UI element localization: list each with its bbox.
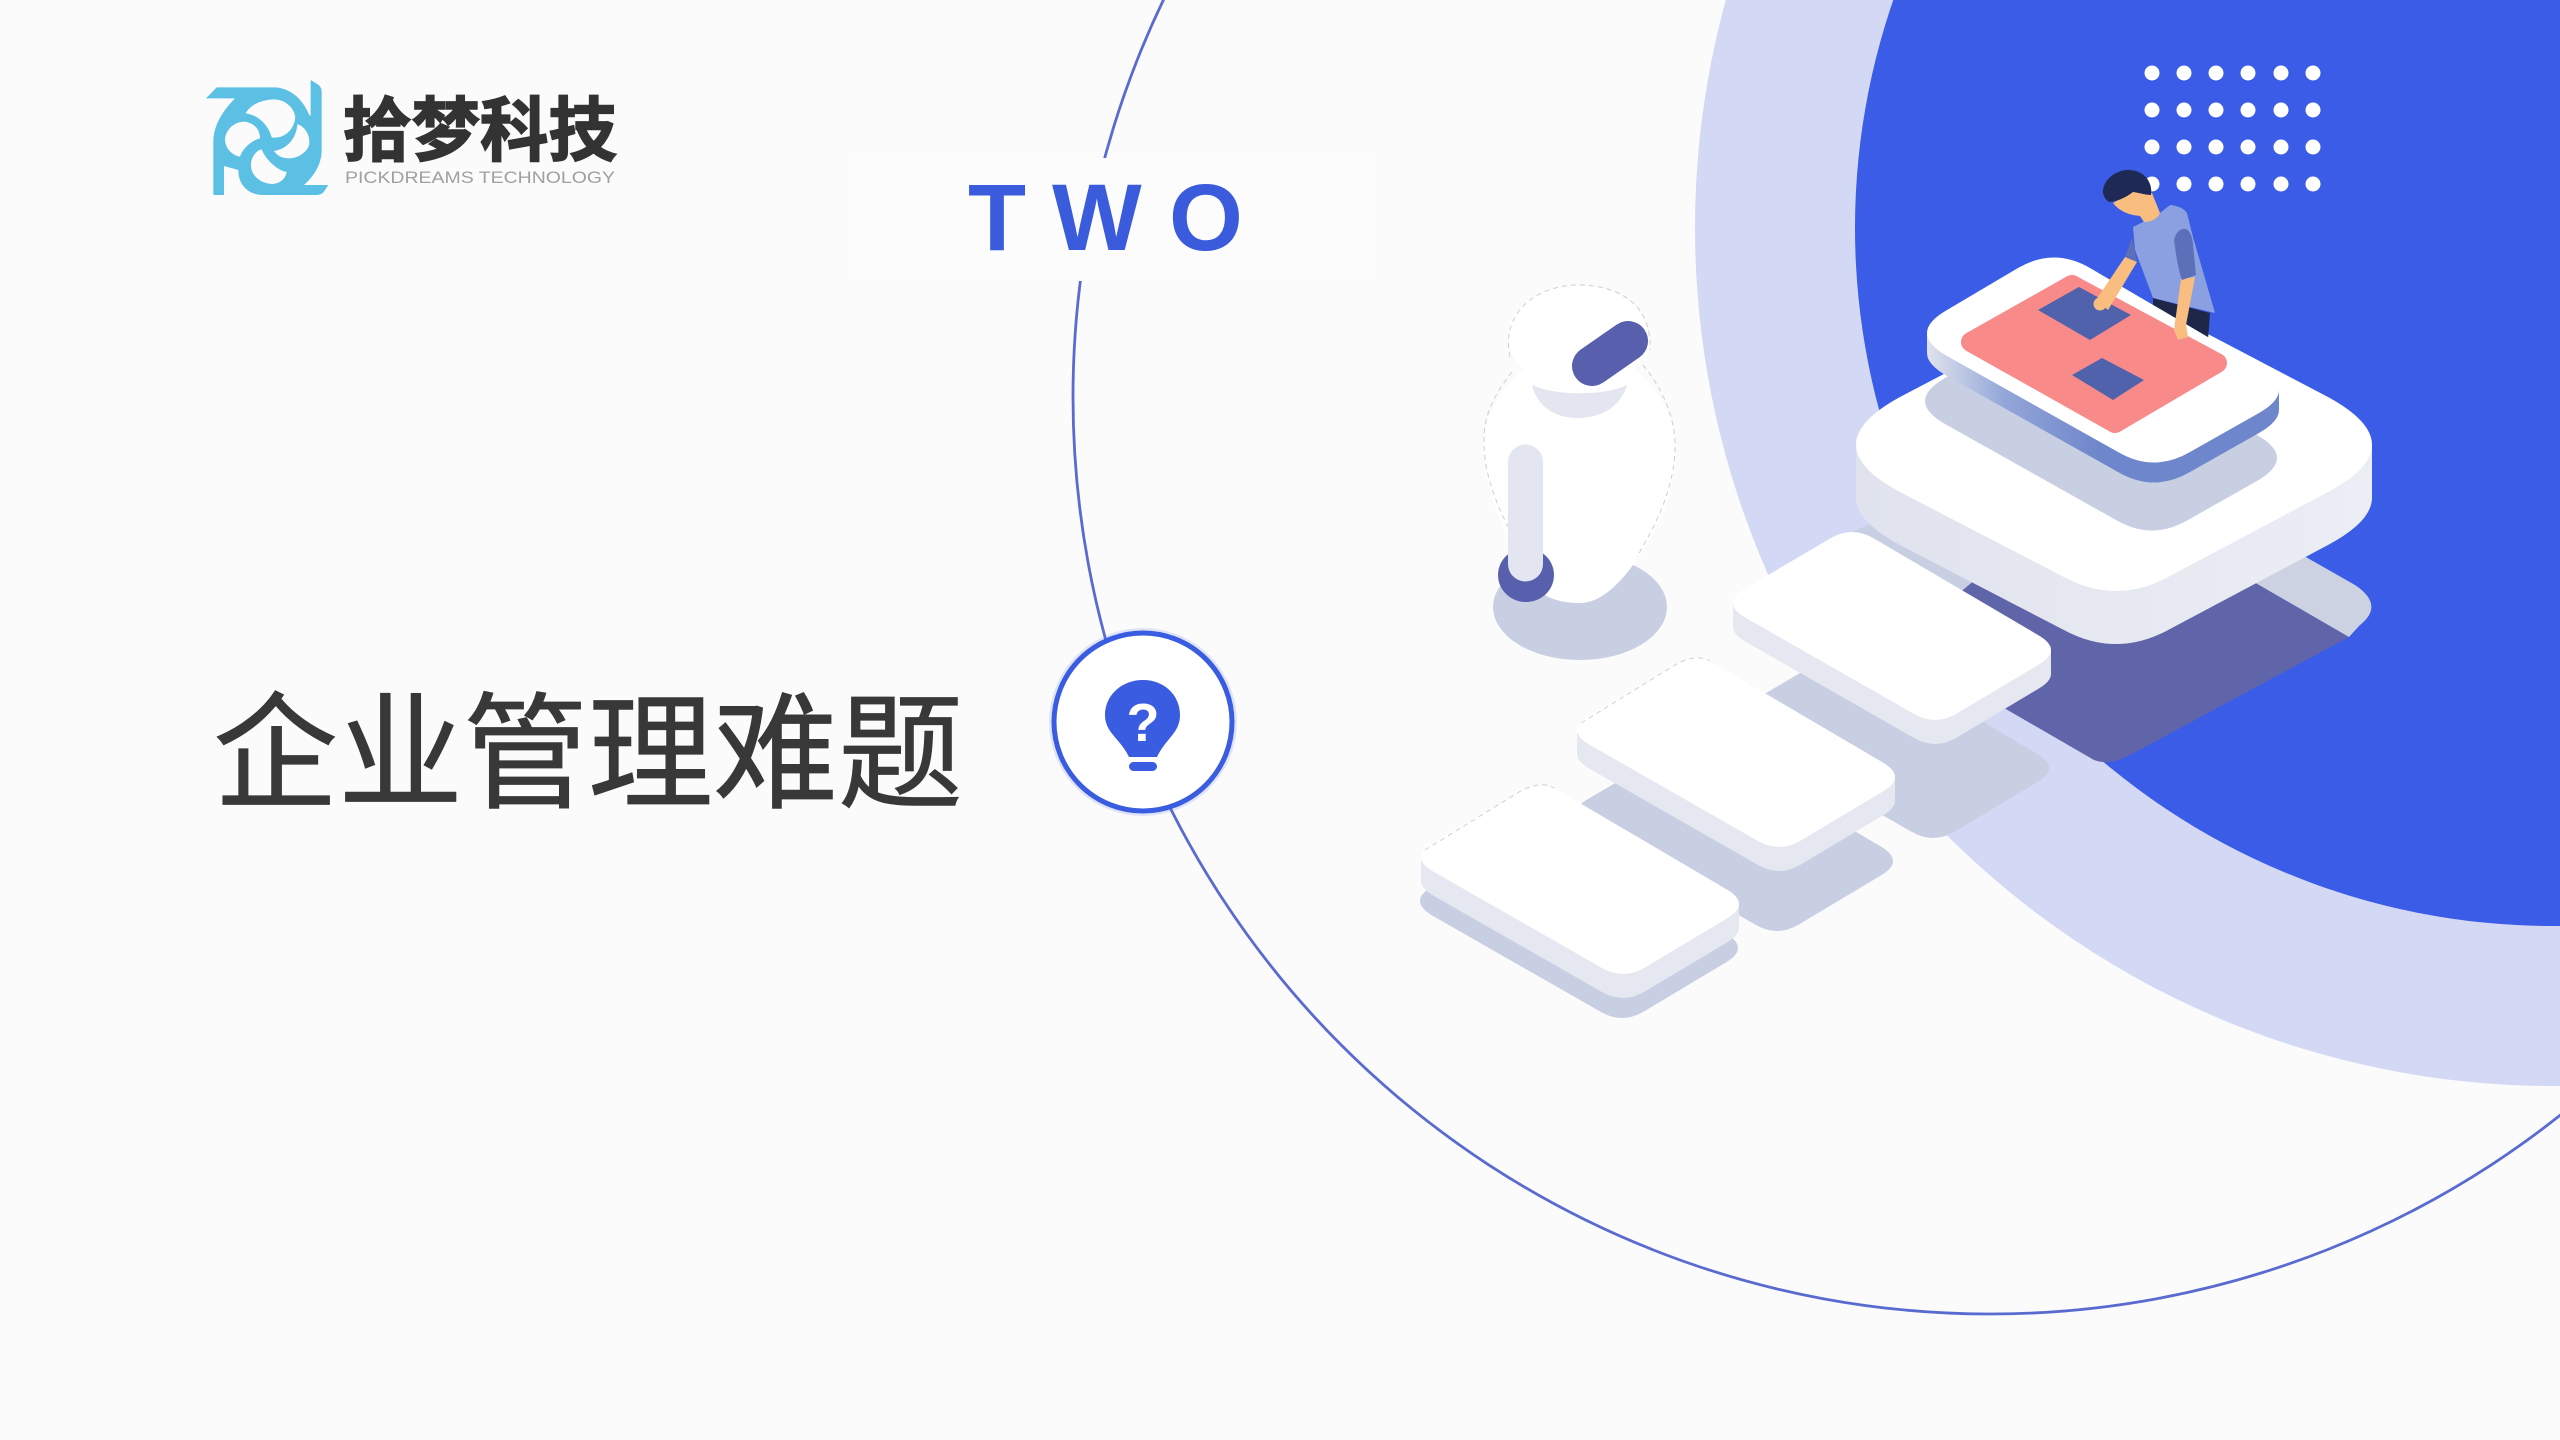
logo tagline: PICKDREAMS TECHNOLOGY [345, 168, 615, 187]
thin circle outline [1073, 0, 2560, 1314]
step platform B [1577, 658, 1895, 871]
trousers [2153, 298, 2210, 340]
hair [2103, 170, 2151, 202]
person body [2103, 170, 2215, 340]
shadows under platforms [1420, 518, 2371, 1018]
robot body [1484, 365, 1675, 603]
large base platform [1856, 298, 2372, 644]
screen square 2 [2072, 358, 2144, 400]
tablet screen [1971, 285, 2217, 423]
heading band: TWO: TWO [968, 165, 1243, 271]
step platform A [1733, 532, 2051, 744]
robot outline [1484, 285, 1675, 557]
robot visor [1592, 341, 1628, 366]
icon: question lightbulb badge: ? [1126, 693, 1160, 753]
person arms [2094, 229, 2196, 340]
tablet [1927, 258, 2279, 482]
neck and face [2113, 191, 2160, 222]
title: 企业管理难题 [213, 684, 963, 825]
left sleeve [2125, 237, 2137, 262]
logo [206, 80, 617, 195]
robot head [1508, 285, 1648, 389]
robot ring [1498, 548, 1554, 602]
shirt [2133, 205, 2215, 313]
heading band: TWO [849, 158, 1376, 281]
robot collar [1532, 385, 1627, 418]
blue disc [1855, 0, 2560, 926]
logo name: 拾梦科技 [343, 92, 617, 170]
dot grid [2144, 66, 2320, 192]
icon: question lightbulb badge [1053, 632, 1233, 812]
screen square 1 [2038, 287, 2131, 340]
robot arm [1508, 462, 1543, 564]
step platform C [1421, 785, 1739, 998]
logo mark [206, 80, 328, 195]
robot [1484, 285, 1675, 660]
robot ground shadow [1493, 554, 1667, 660]
tablet shadow [1925, 326, 2277, 530]
light lavender disc [1695, 0, 2560, 1086]
